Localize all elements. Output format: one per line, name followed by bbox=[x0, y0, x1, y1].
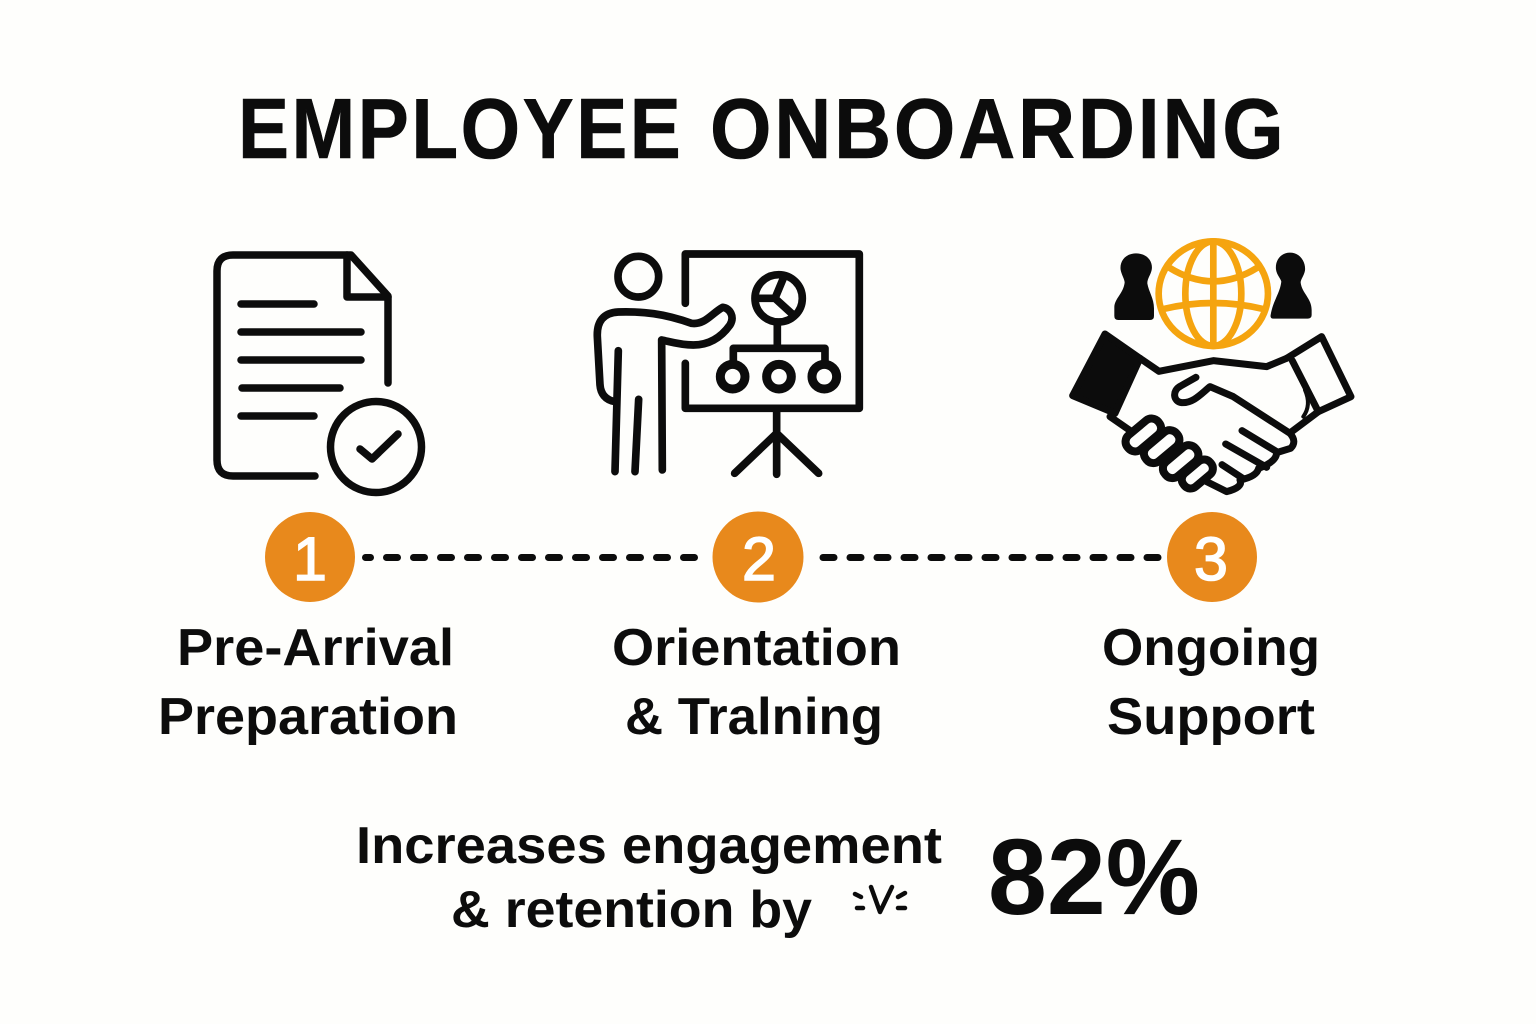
connector: dotted line 2 to 3 bbox=[823, 554, 1160, 561]
step badge 1: 1 bbox=[293, 525, 327, 593]
callout text: Increases engagement bbox=[356, 817, 942, 875]
callout text: & retention by bbox=[451, 881, 812, 939]
step label: Pre-Arrival Preparation bbox=[158, 619, 458, 746]
icon: left person bbox=[1114, 253, 1154, 320]
connector: dotted line 1 to 2 bbox=[366, 554, 705, 561]
icon: handshake with globe and people bbox=[1073, 241, 1351, 492]
callout text bbox=[356, 817, 942, 939]
step badge 2 bbox=[712, 512, 804, 602]
step label: Orientation & Training bbox=[612, 619, 901, 746]
icon: handshake bbox=[1073, 334, 1351, 492]
step label: Ongoing Support: Support bbox=[1107, 688, 1315, 746]
step badge 3: 3 bbox=[1194, 525, 1228, 593]
step badge 3 bbox=[1167, 512, 1257, 602]
step label: Ongoing Support bbox=[1102, 619, 1320, 746]
title: EMPLOYEE bbox=[238, 82, 681, 177]
step label: Orientation & Training: & Tralning bbox=[625, 688, 883, 746]
icon: right person bbox=[1271, 253, 1312, 319]
step label: Orientation & Training: Orientation bbox=[612, 619, 901, 677]
step label: Pre-Arrival Preparation: Preparation bbox=[158, 688, 458, 746]
title bbox=[238, 82, 1284, 177]
icon: small burst mark bbox=[855, 887, 905, 912]
step label: Ongoing Support: Ongoing bbox=[1102, 619, 1320, 677]
step badge 2: 2 bbox=[742, 525, 776, 593]
icon: globe bbox=[1159, 241, 1268, 346]
icon: document with check mark bbox=[217, 255, 422, 492]
step label: Pre-Arrival Preparation: Pre-Arrival bbox=[177, 619, 454, 677]
step badge 1 bbox=[265, 512, 355, 602]
icon: presenter at a board bbox=[597, 254, 859, 474]
statistic: 82%: 82% bbox=[988, 816, 1200, 937]
title: ONBOARDING bbox=[710, 82, 1284, 177]
